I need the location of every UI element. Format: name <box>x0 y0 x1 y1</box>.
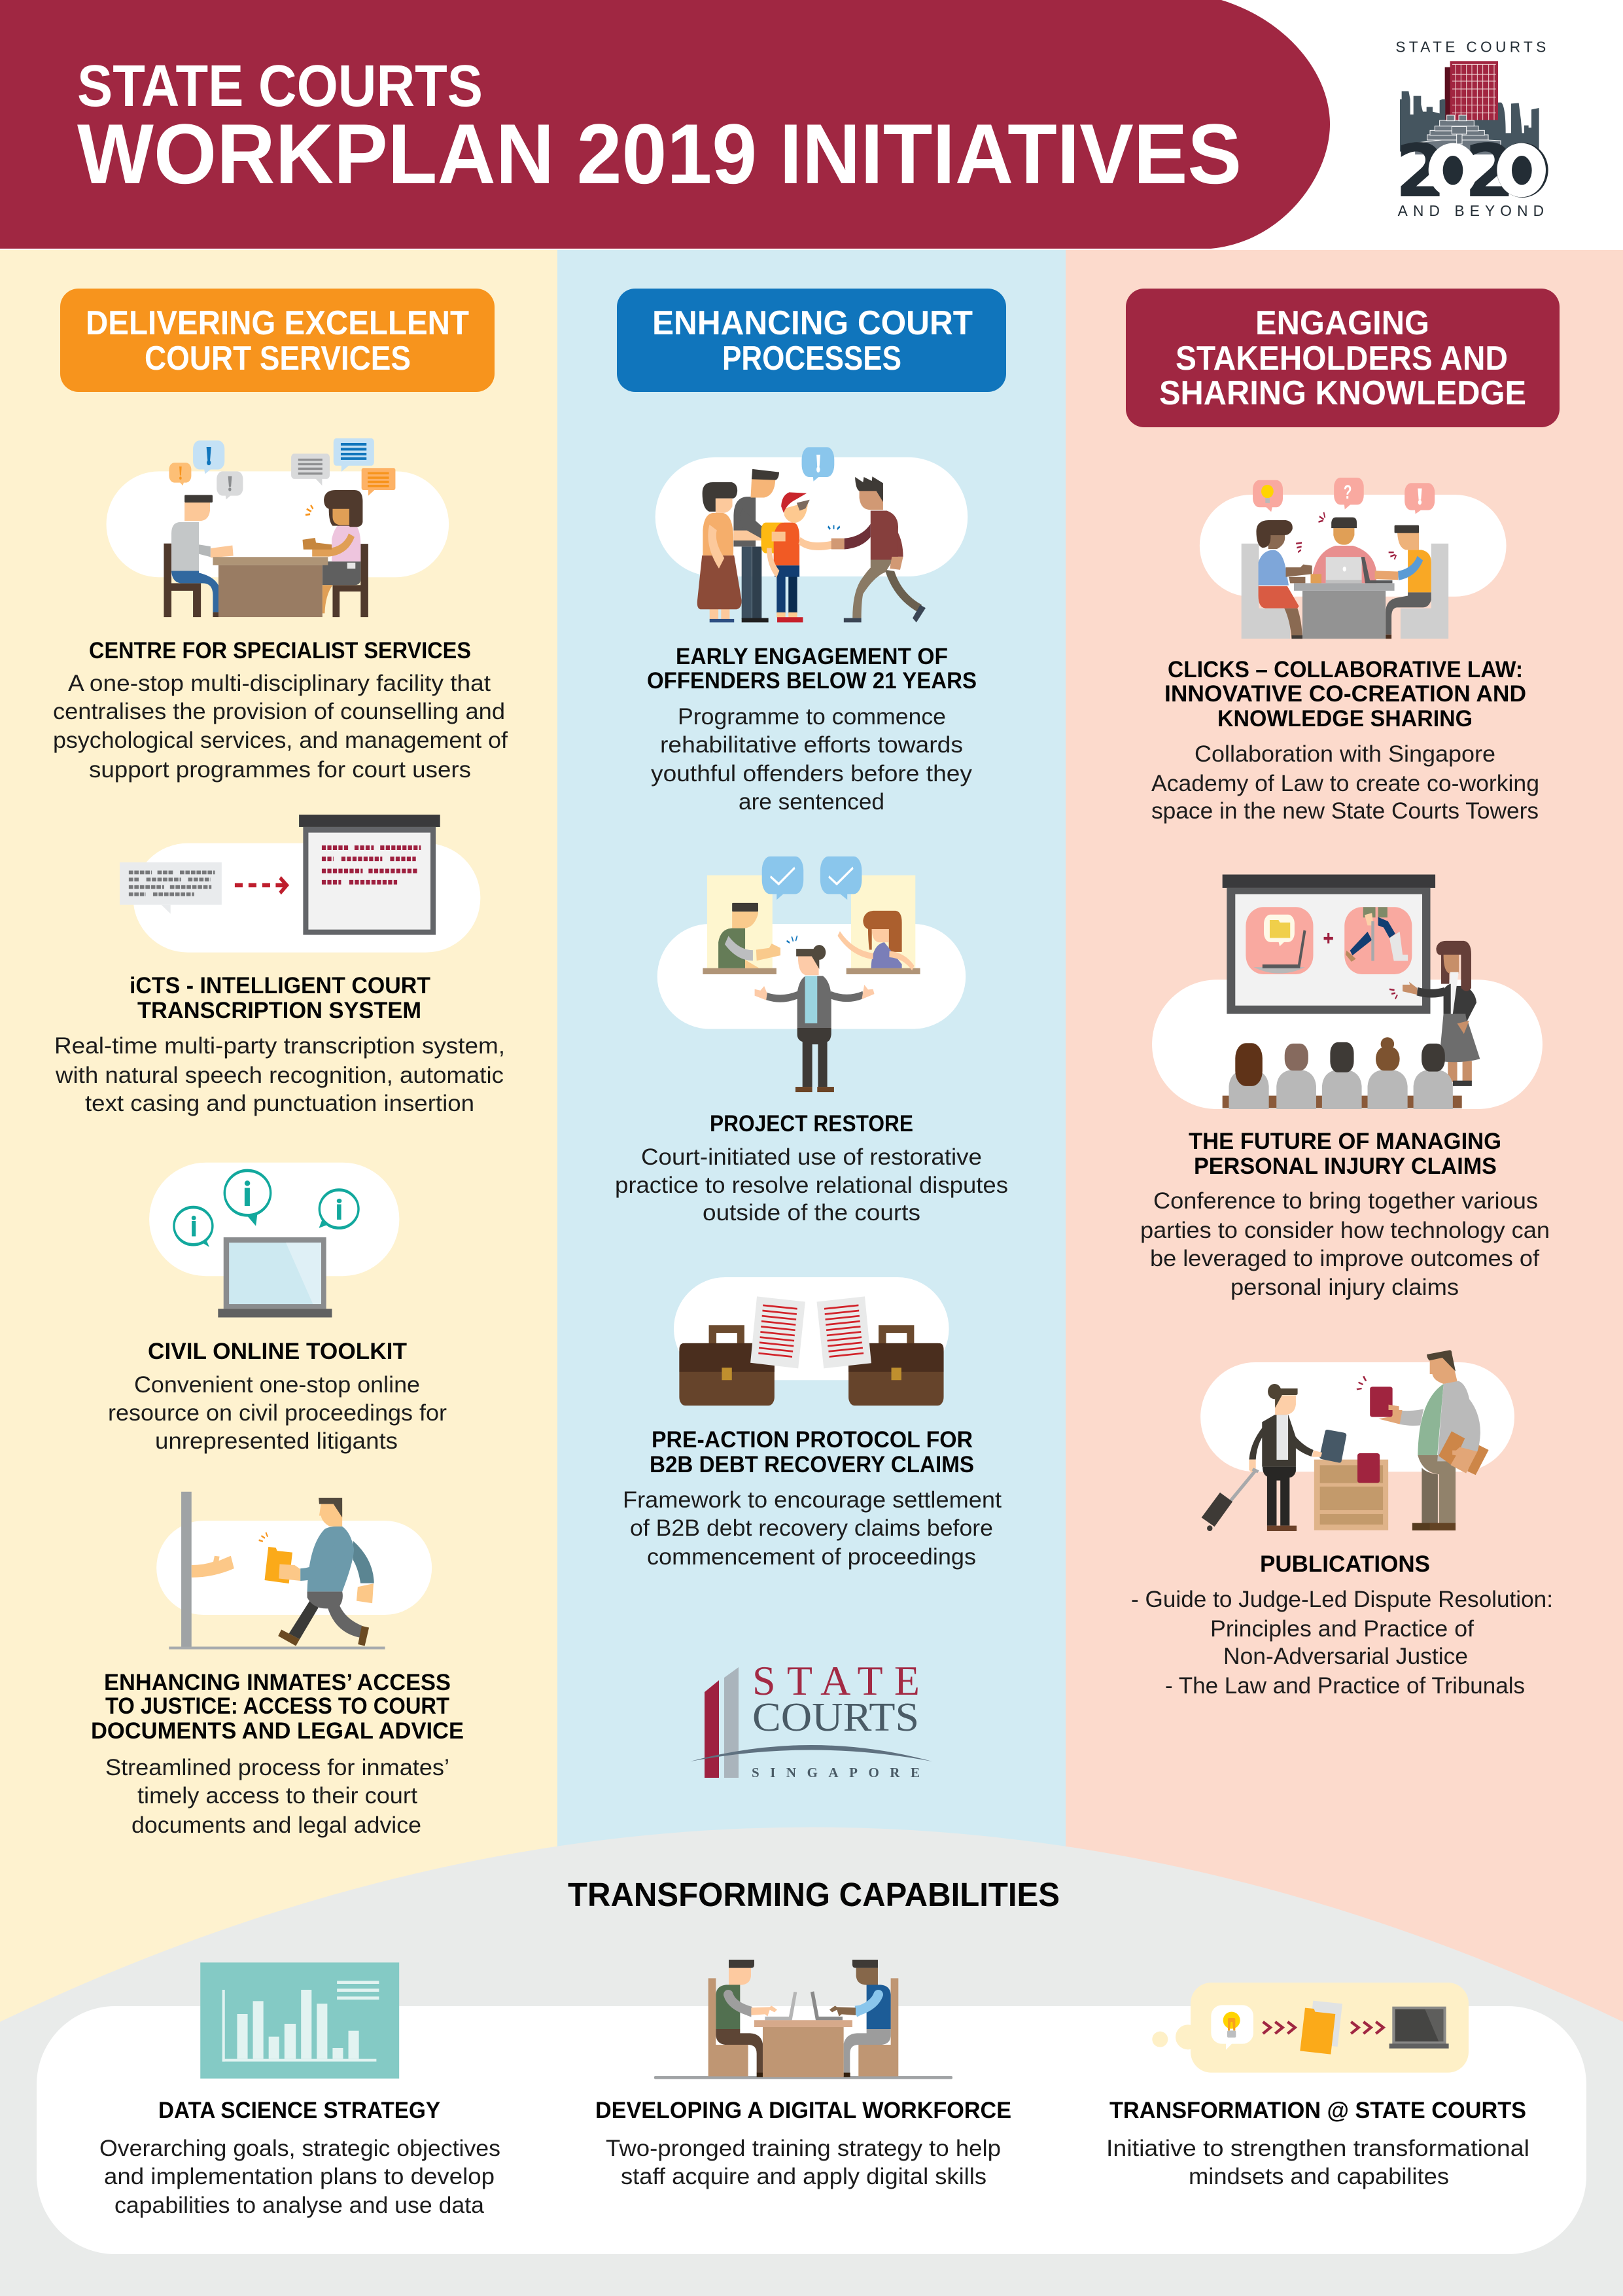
panel: transforming capabilities <box>0 1827 1623 2296</box>
heading: enhancing court processes <box>617 289 1006 392</box>
text: data science strategy: capabilities to analyse and use data <box>114 2193 485 2218</box>
text: publications: - The Law and Practice of Tribunals <box>1165 1673 1525 1699</box>
text: project restore <box>615 1111 1008 1226</box>
text: early engagement: OFFENDERS BELOW 21 YEARS <box>647 668 977 694</box>
text: developing a digital workforce: staff acquire and apply digital skills <box>621 2164 986 2189</box>
text: transformation at state courts <box>1106 2098 1529 2189</box>
text: pre-action protocol: PRE-ACTION PROTOCOL FOR <box>652 1427 973 1453</box>
icon: idea, question and alert bubbles: ? <box>1344 482 1352 503</box>
text: centre for specialist services <box>53 638 508 783</box>
heading: engaging stakeholders: ENGAGING <box>1255 304 1429 342</box>
text: centre for specialist services: CENTRE FOR SPECIALIST SERVICES <box>89 638 471 663</box>
panel: engaging stakeholders and sharing knowledge <box>1126 289 1560 1699</box>
logo: State Courts Singapore: STATE <box>752 1657 920 1704</box>
logo: State Courts 2020 and Beyond: AND BEYOND <box>1398 202 1544 219</box>
logo: State Courts 2020 and Beyond: 2 <box>1464 129 1515 214</box>
text: developing a digital workforce: DEVELOPING A DIGITAL WORKFORCE <box>595 2098 1011 2123</box>
text: clicks: Academy of Law to create co-working <box>1151 771 1539 796</box>
illustration: inmate receiving documents <box>156 1492 432 1650</box>
header banner <box>0 0 1330 249</box>
panel: delivering excellent court services <box>53 289 508 1838</box>
logo: State Courts 2020 and Beyond: 2 <box>1395 129 1446 214</box>
text: pre-action protocol: B2B DEBT RECOVERY CLAIMS <box>650 1452 974 1477</box>
illustration: laptop with info bubbles <box>149 1163 399 1317</box>
text: future of managing personal injury claims: parties to consider how technology can <box>1140 1218 1550 1243</box>
text: iCTS: Real-time multi-party transcription system, <box>54 1033 505 1059</box>
text: civil online toolkit <box>108 1339 447 1454</box>
heading: delivering excellent court services: DELIVERING EXCELLENT <box>86 304 469 342</box>
text: project restore: PROJECT RESTORE <box>710 1111 913 1137</box>
text: centre for specialist services: A one-stop multi-disciplinary facility that <box>68 671 491 696</box>
audience <box>1229 1037 1453 1109</box>
text: project restore: Court-initiated use of restorative <box>641 1144 982 1170</box>
text: clicks: KNOWLEDGE SHARING <box>1217 706 1473 732</box>
text: enhancing inmates' access: DOCUMENTS AND LEGAL ADVICE <box>91 1718 464 1744</box>
text: transformation at state courts: Initiative to strengthen transformational <box>1106 2136 1529 2161</box>
heading: delivering excellent court services <box>60 289 495 392</box>
text: iCTS <box>54 973 505 1116</box>
heading: engaging stakeholders: STAKEHOLDERS AND <box>1176 340 1508 378</box>
text: pre-action protocol: commencement of proceedings <box>647 1544 976 1570</box>
illustration: two people on laptops <box>654 1960 952 2079</box>
heading: transforming capabilities: TRANSFORMING CAPABILITIES <box>568 1876 1060 1913</box>
text: project restore: outside of the courts <box>703 1200 920 1226</box>
panel: enhancing court processes <box>615 289 1008 1780</box>
text: developing a digital workforce: Two-pronged training strategy to help <box>606 2136 1001 2161</box>
text: future of managing personal injury claims: THE FUTURE OF MANAGING <box>1189 1129 1501 1154</box>
text: early engagement: Programme to commence <box>678 704 946 730</box>
text: clicks <box>1151 657 1539 824</box>
heading: engaging stakeholders <box>1126 289 1560 427</box>
title: STATE COURTS <box>77 54 483 119</box>
text: iCTS: iCTS - INTELLIGENT COURT <box>130 973 430 998</box>
text: future of managing personal injury claims: personal injury claims <box>1230 1275 1459 1300</box>
text: pre-action protocol: Framework to encourage settlement <box>623 1487 1002 1513</box>
text: centre for specialist services: centralises the provision of counselling and <box>53 699 505 724</box>
text: centre for specialist services: support programmes for court users <box>89 757 471 783</box>
chart: data science bar chart <box>200 1962 399 2079</box>
text: pre-action protocol: of B2B debt recovery claims before <box>630 1515 993 1541</box>
text: transformation at state courts: TRANSFORMATION @ STATE COURTS <box>1109 2098 1526 2123</box>
text: future of managing personal injury claims <box>1140 1129 1550 1300</box>
text: civil online toolkit: resource on civil proceedings for <box>108 1400 447 1426</box>
text: early engagement <box>647 644 977 815</box>
text: clicks: CLICKS – COLLABORATIVE LAW: <box>1168 657 1523 682</box>
text: iCTS: TRANSCRIPTION SYSTEM <box>137 998 421 1023</box>
text: publications: - Guide to Judge-Led Dispute Resolution: <box>1131 1587 1553 1612</box>
text: centre for specialist services: psychological services, and management of <box>53 728 508 753</box>
heading: engaging stakeholders: SHARING KNOWLEDGE <box>1159 374 1526 412</box>
text: enhancing inmates' access: timely access to their court <box>137 1783 417 1809</box>
logo: State Courts 2020 and Beyond: STATE COURTS <box>1395 38 1546 55</box>
text: project restore: practice to resolve relational disputes <box>615 1173 1008 1198</box>
text: future of managing personal injury claims: Conference to bring together various <box>1153 1188 1538 1214</box>
illustration: mediator between two people <box>657 857 966 1092</box>
title: WORKPLAN 2019 INITIATIVES <box>77 106 1242 202</box>
text: data science strategy: Overarching goals, strategic objectives <box>99 2136 500 2161</box>
text: civil online toolkit: Convenient one-stop online <box>134 1372 420 1398</box>
text: civil online toolkit: CIVIL ONLINE TOOLKIT <box>148 1339 407 1364</box>
text: civil online toolkit: unrepresented litigants <box>155 1428 398 1454</box>
logo: State Courts Singapore: SINGAPORE <box>752 1765 920 1780</box>
text: early engagement: are sentenced <box>739 789 884 815</box>
illustration: two people talking at a desk <box>106 438 449 617</box>
text: data science strategy <box>99 2098 500 2218</box>
logo: State Courts Singapore: COURTS <box>752 1695 919 1740</box>
text: future of managing personal injury claims: PERSONAL INJURY CLAIMS <box>1194 1154 1497 1179</box>
text: developing a digital workforce <box>595 2098 1011 2189</box>
text: publications: Non-Adversarial Justice <box>1223 1644 1468 1669</box>
illustration: presentation to audience <box>1152 875 1543 1109</box>
text: early engagement: rehabilitative efforts towards <box>660 732 963 758</box>
text: early engagement: EARLY ENGAGEMENT OF <box>676 644 948 669</box>
logo: State Courts Singapore <box>690 1657 932 1780</box>
heading: enhancing court processes: PROCESSES <box>722 340 901 378</box>
text: enhancing inmates' access: Streamlined process for inmates’ <box>105 1755 449 1780</box>
illustration: three people collaborating <box>1200 478 1507 639</box>
text: publications: Principles and Practice of <box>1210 1616 1474 1642</box>
text: data science strategy: DATA SCIENCE STRATEGY <box>158 2098 440 2123</box>
illustration: idea to document to laptop <box>1152 1983 1469 2073</box>
heading: enhancing court processes: ENHANCING COURT <box>652 304 973 342</box>
text: early engagement: youthful offenders before they <box>651 761 973 786</box>
logo: State Courts 2020 and Beyond <box>1395 38 1548 219</box>
text: enhancing inmates' access: ENHANCING INMATES’ ACCESS <box>104 1670 451 1695</box>
illustration: family meets officer <box>655 447 968 622</box>
title <box>77 54 1242 202</box>
text: transformation at state courts: mindsets and capabilites <box>1189 2164 1449 2189</box>
text: enhancing inmates' access <box>91 1670 464 1838</box>
text: iCTS: text casing and punctuation insertion <box>85 1091 474 1116</box>
illustration: briefcases exchanging documents <box>674 1277 949 1405</box>
illustration: exchanging publications <box>1200 1350 1514 1531</box>
icon: idea, question and alert bubbles <box>1253 478 1435 514</box>
illustration: speech transcribed to screen <box>120 815 480 953</box>
text: pre-action protocol <box>623 1427 1002 1570</box>
icon: speech bubbles <box>169 438 395 499</box>
text: iCTS: with natural speech recognition, automatic <box>55 1063 504 1088</box>
text: publications <box>1131 1551 1553 1699</box>
text: clicks: Collaboration with Singapore <box>1195 741 1495 767</box>
text: clicks: INNOVATIVE CO-CREATION AND <box>1164 681 1526 707</box>
text: publications: PUBLICATIONS <box>1260 1551 1430 1577</box>
heading: delivering excellent court services: COURT SERVICES <box>145 340 411 378</box>
text: data science strategy: and implementation plans to develop <box>104 2164 495 2189</box>
text: future of managing personal injury claims: be leveraged to improve outcomes of <box>1150 1246 1539 1271</box>
text: enhancing inmates' access: documents and legal advice <box>131 1812 421 1838</box>
text: clicks: space in the new State Courts Towers <box>1151 798 1539 824</box>
text: enhancing inmates' access: TO JUSTICE: ACCESS TO COURT <box>105 1693 449 1719</box>
